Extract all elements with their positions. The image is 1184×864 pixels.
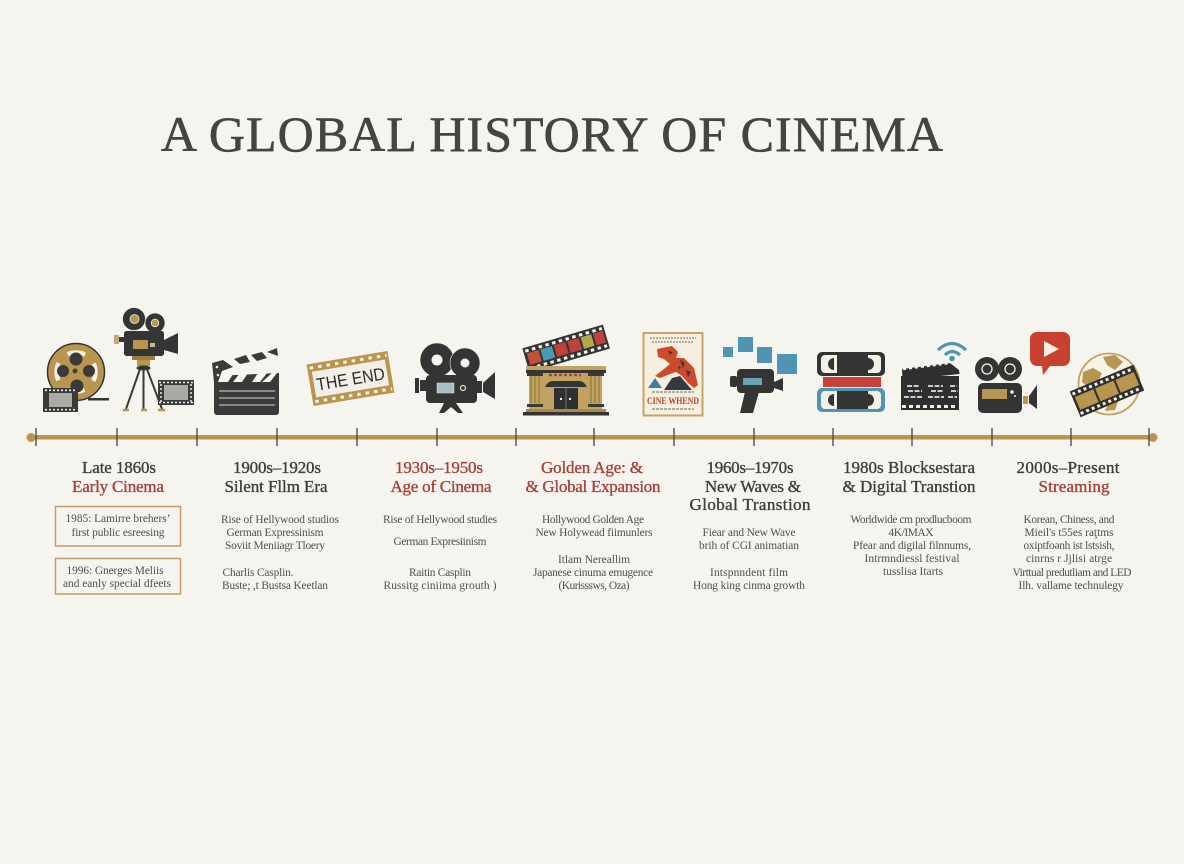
icon: streaming camera with play bubble xyxy=(975,332,1070,413)
text block: golden age notes: Hollywood Golden Age xyxy=(542,514,644,526)
column: Silent Film Era xyxy=(221,458,340,592)
column: 2000s to Present Streaming: 2000s–Present xyxy=(1016,458,1120,477)
text block: silent era notes: Rise of Hellywood studios xyxy=(221,514,340,526)
text block: streaming notes: Korean, Chiness, and xyxy=(1024,514,1115,526)
text block: streaming notes: cinrns r Jjlisi atrge xyxy=(1026,553,1112,565)
text block: golden age notes: Japanese cinuma emugence xyxy=(533,567,653,579)
callout: 1996: 1996: Gnerges Meliis xyxy=(66,565,164,577)
text block: new waves notes: brih of CGI animatian xyxy=(699,540,799,552)
icon: film reel xyxy=(43,344,109,412)
icon: VHS tapes xyxy=(817,352,885,412)
icon: monster movie poster xyxy=(644,333,702,416)
icon: clapperboard xyxy=(212,348,279,415)
column: Late 1860s Early Cinema: Early Cinema xyxy=(72,477,164,496)
column: 1980s Blockbusters and Digital Transition: & Digital Transtion xyxy=(842,477,976,496)
column: Age of Cinema: Age of Cinema xyxy=(390,477,492,496)
text block: streaming notes: Mieil's t55es raţtms xyxy=(1024,527,1114,539)
text block: golden age notes: New Holywead fiimunlers xyxy=(536,527,653,539)
text block: age of cinema notes: Rise of Hellywood studies xyxy=(383,514,498,526)
column: Golden Age and Global Expansion xyxy=(526,458,661,592)
title: A GLOBAL HISTORY OF CINEMA xyxy=(161,106,943,162)
callout: 1985 xyxy=(56,506,180,546)
column: Age of Cinema: 1930s–1950s xyxy=(395,458,483,477)
text block: new waves notes: Intspnndent film xyxy=(710,567,788,579)
column: Silent Film Era: 1900s–1920s xyxy=(233,458,321,477)
text block: new waves notes: Hong king cinma growth xyxy=(693,580,805,592)
text block: age of cinema notes: Russitg ciniima grouth ) xyxy=(384,580,497,592)
text block: 1980s notes: Pfear and digilal filnnums, xyxy=(853,540,971,552)
icon: The End ticket: THE END xyxy=(315,363,386,395)
column: New Waves and Global Transition: 1960s–1970s xyxy=(706,458,794,477)
icon: movie theater with film strip xyxy=(522,325,610,416)
column: Age of Cinema xyxy=(383,458,498,592)
text block: new waves notes xyxy=(693,527,805,592)
column: Golden Age and Global Expansion: Golden Age: & xyxy=(541,458,643,477)
icon: vintage film camera xyxy=(415,343,495,413)
text block: 1980s notes xyxy=(850,514,972,578)
text block: streaming notes: Ilh. vallame technulegy xyxy=(1018,580,1124,592)
callout: 1996: and eanly special dfeets xyxy=(63,578,172,590)
text block: silent era notes: Soviit Meniiagr Tloery xyxy=(225,540,325,552)
column: New Waves and Global Transition: New Waves & xyxy=(705,477,801,496)
text block: golden age notes: (Kurisssws, Oza) xyxy=(558,580,630,592)
text block: streaming notes xyxy=(1012,514,1132,592)
column: 1980s Blockbusters and Digital Transition: 1980s Blocksestara xyxy=(843,458,975,477)
column: 2000s to Present Streaming xyxy=(1012,458,1132,592)
text block: 1980s notes: Worldwide cm prodlucboom xyxy=(850,514,972,526)
timeline axis xyxy=(26,428,1158,446)
icon: camera on tripod xyxy=(114,308,194,410)
icon: The End ticket xyxy=(307,351,394,406)
text block: streaming notes: Virttual predutliam and LED xyxy=(1012,567,1132,579)
column: New Waves and Global Transition: Global Transtion xyxy=(690,495,811,514)
text block: silent era notes: Charlis Casplin. xyxy=(222,567,294,579)
icon: digital clapperboard with wifi xyxy=(901,344,966,410)
column: Late 1860s Early Cinema xyxy=(56,458,180,594)
text block: new waves notes: Fiear and New Wave xyxy=(702,527,796,539)
text block: silent era notes xyxy=(221,514,340,592)
text block: 1980s notes: Intrmndiessl festival xyxy=(864,553,960,565)
text block: age of cinema notes xyxy=(383,514,498,592)
text block: 1980s notes: 4K/IMAX xyxy=(888,527,934,539)
text block: silent era notes: Buste; ,t Bustsa Keetlan xyxy=(222,580,328,592)
text block: silent era notes: German Expressinism xyxy=(226,527,324,539)
text block: golden age notes xyxy=(533,514,653,592)
text block: streaming notes: oxiptfoənh ist lstsish, xyxy=(1024,540,1115,552)
column: 1980s Blockbusters and Digital Transition xyxy=(842,458,976,578)
icon: monster movie poster: CINE WHEND xyxy=(647,396,699,406)
column: Silent Film Era: Silent Fllm Era xyxy=(224,477,328,496)
text block: 1980s notes: tusslisa Itarts xyxy=(883,566,944,578)
text block: age of cinema notes: German Expresiinism xyxy=(394,536,487,548)
icon: globe with film strip xyxy=(1070,354,1144,417)
callout: 1985: first public esreesing xyxy=(72,527,165,539)
callout: 1996 xyxy=(56,558,180,594)
column: New Waves and Global Transition xyxy=(690,458,811,592)
column: Late 1860s Early Cinema: Late 1860s xyxy=(82,458,156,477)
callout: 1985: 1985: Lamirre brehers’ xyxy=(66,513,170,525)
column: 2000s to Present Streaming: Streaming xyxy=(1038,477,1110,496)
text block: golden age notes: Itlam Nereallim xyxy=(558,554,630,566)
icon: digital video camera with pixels xyxy=(723,337,797,413)
text block: age of cinema notes: Raitin Casplin xyxy=(409,567,471,579)
column: Golden Age and Global Expansion: & Global Expansion xyxy=(526,477,661,496)
